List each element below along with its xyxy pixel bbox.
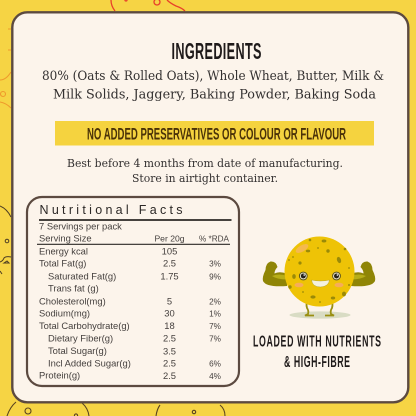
table: nutrition rows: 9% <box>209 272 221 281</box>
table: nutrition rows: Total Fat(g) <box>39 258 86 269</box>
table: nutrition rows: Saturated Fat(g) <box>48 270 116 281</box>
panel: nutritional facts <box>27 197 239 386</box>
icon: muscular biscuit mascot <box>263 236 375 319</box>
table: nutrition rows: 2% <box>209 297 221 306</box>
table: nutrition rows: 4% <box>209 372 221 381</box>
doodles: top red outline <box>111 0 185 11</box>
table: nutrition rows: 1% <box>209 310 221 319</box>
table: nutrition rows: 2.5 <box>163 370 176 381</box>
table: nutrition rows: 105 <box>162 245 177 256</box>
table: nutrition rows: 6% <box>209 360 221 369</box>
table: nutrition rows: 18 <box>164 320 175 331</box>
table: nutrition rows: Total Carbohydrate(g) <box>39 320 130 331</box>
text block: best before: Store in airtight container. <box>132 171 278 185</box>
heading: nutritional facts: Nutritional Facts <box>40 203 182 217</box>
text block: loaded with nutrients <box>253 332 381 371</box>
doodles: lower left dark outline <box>0 206 11 274</box>
table: nutrition rows: 2.5 <box>163 358 176 369</box>
table: nutrition rows: Energy kcal <box>39 245 88 256</box>
table: nutrition rows: Sodium(mg) <box>39 308 90 319</box>
table: nutrition rows: 30 <box>164 308 175 319</box>
text block: loaded with nutrients: & HIGH-FIBRE <box>284 352 350 371</box>
table: nutrition rows: Dietary Fiber(g) <box>48 333 113 344</box>
banner: no added preservatives <box>55 121 374 146</box>
table: nutrition rows: Protein(g) <box>39 370 80 381</box>
table: nutrition rows: Cholesterol(mg) <box>39 295 106 306</box>
table: nutrition rows: 2.5 <box>163 258 176 269</box>
table: nutrition rows: Per 20g <box>154 234 185 244</box>
banner: no added preservatives: NO ADDED PRESERVATIVES OR COLOUR OR FLAVOUR <box>87 125 346 143</box>
table: nutrition rows: 1.75 <box>160 270 179 281</box>
table: nutrition rows: 7 Servings per pack <box>39 220 122 232</box>
table: nutrition rows: Total Sugar(g) <box>48 345 107 356</box>
table: nutrition rows: 5 <box>167 295 172 306</box>
text block: best before <box>67 156 343 185</box>
table: nutrition rows: % *RDA <box>199 234 230 244</box>
table: nutrition rows <box>39 220 230 381</box>
heading: ingredients: INGREDIENTS <box>172 38 261 64</box>
doodles: left orange outline <box>0 29 11 108</box>
table: nutrition rows: 3% <box>209 260 221 269</box>
text block: loaded with nutrients: LOADED WITH NUTRIENTS <box>253 332 381 350</box>
table: nutrition rows: Trans fat (g) <box>48 283 99 294</box>
text block: ingredients list <box>42 69 384 102</box>
text block: ingredients list: Milk Solids, Jaggery, Baking Powder, Baking Soda <box>53 88 376 102</box>
table: nutrition rows: 2.5 <box>163 333 176 344</box>
table: nutrition rows: 7% <box>209 322 221 331</box>
text block: best before: Best before 4 months from date of manufacturing. <box>67 156 343 170</box>
table: nutrition rows: Incl Added Sugar(g) <box>48 358 131 369</box>
table: nutrition rows: 7% <box>209 335 221 344</box>
text block: ingredients list: 80% (Oats & Rolled Oats), Whole Wheat, Butter, Milk & <box>42 69 384 84</box>
table: nutrition rows: 3.5 <box>163 346 176 356</box>
doodles: bottom dark outline <box>7 402 225 416</box>
table: nutrition rows: Serving Size <box>39 232 92 244</box>
